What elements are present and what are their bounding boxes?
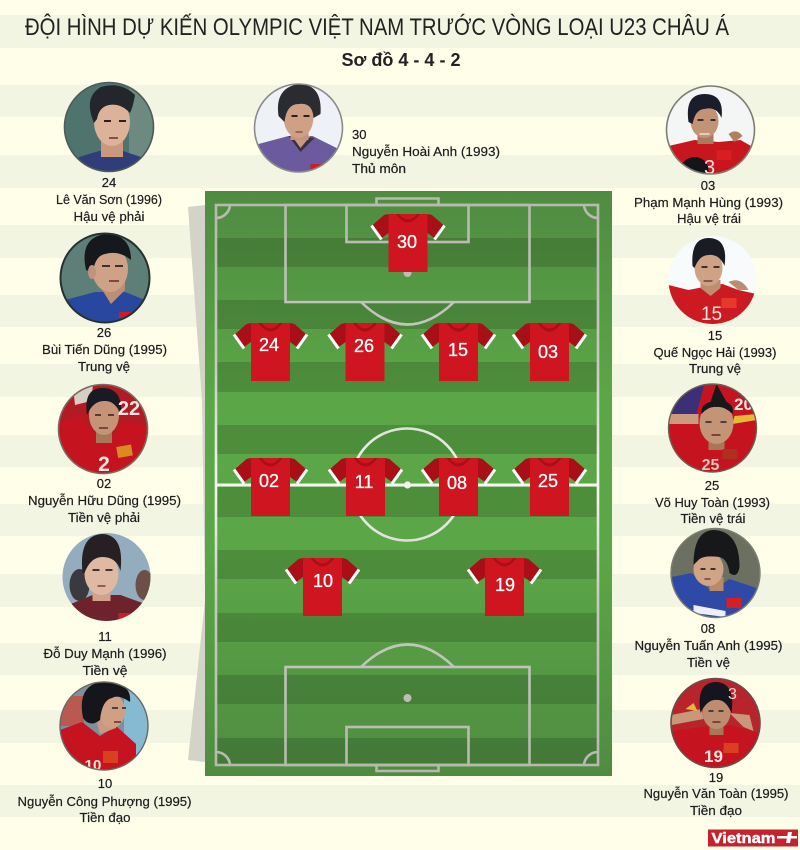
portrait: Phạm Mạnh Hùng [666, 85, 756, 183]
player card: 15 Quế Ngọc Hải: Trung vệ [689, 361, 741, 376]
player card: 11 Đỗ Duy Mạnh: 11 [98, 629, 112, 644]
jersey 15 [422, 323, 495, 381]
portrait: Nguyễn Hoài Anh [254, 83, 344, 173]
player card: 11 Đỗ Duy Mạnh [44, 532, 166, 678]
portrait: Nguyễn Hữu Dũng: 2 [98, 453, 110, 476]
portrait: Nguyễn Văn Toàn [670, 678, 760, 768]
jersey 26 [328, 323, 402, 381]
player card: 26 Bùi Tiến Dũng: 26 [97, 325, 111, 340]
jersey 03 [513, 323, 586, 381]
player card: 25 Võ Huy Toàn: Tiền vệ trái [680, 511, 746, 526]
jersey 02: 02 [259, 471, 279, 491]
player card: 30 Nguyễn Hoài Anh: Nguyễn Hoài Anh (1993) [352, 144, 500, 159]
portrait: Võ Huy Toàn [668, 383, 758, 474]
player card: 26 Bùi Tiến Dũng: Trung vệ [78, 359, 130, 374]
player card: 30 Nguyễn Hoài Anh: 30 [352, 127, 366, 142]
player card: 30 Nguyễn Hoài Anh: Thủ môn [352, 161, 406, 176]
player card: 19 Nguyễn Văn Toàn: Tiền đạo [690, 803, 742, 818]
player card: 15 Quế Ngọc Hải: Quế Ngọc Hải (1993) [654, 345, 776, 360]
portrait: Nguyễn Công Phượng: 10 [85, 757, 101, 774]
jersey 03: 03 [538, 342, 558, 362]
player card: 25 Võ Huy Toàn: Võ Huy Toàn (1993) [655, 495, 770, 510]
subtitle: Sơ đồ 4 - 4 - 2 [342, 50, 460, 70]
player card: 19 Nguyễn Văn Toàn: 19 [709, 770, 723, 785]
jersey 11: 11 [355, 472, 373, 492]
player card: 08 Nguyễn Tuấn Anh [634, 528, 782, 670]
portrait: Lê Văn Sơn [64, 82, 154, 172]
portrait: Quế Ngọc Hải: 15 [701, 304, 722, 325]
portrait: Quế Ngọc Hải [668, 235, 758, 325]
player card: 10 Nguyễn Công Phượng: Nguyễn Công Phượng (1995) [18, 794, 192, 809]
player card: 10 Nguyễn Công Phượng: 10 [98, 776, 112, 791]
player card: 24 Lê Văn Sơn: Hậu vệ phải [74, 209, 145, 224]
player card: 03 Phạm Mạnh Hùng [634, 85, 783, 226]
player card: 24 Lê Văn Sơn: Lê Văn Sơn (1996) [56, 192, 162, 207]
player card: 26 Bùi Tiến Dũng [42, 233, 167, 374]
player card: 15 Quế Ngọc Hải: 15 [708, 328, 722, 343]
jersey 25 [513, 458, 586, 516]
player card: 15 Quế Ngọc Hải [654, 235, 776, 376]
player card: 19 Nguyễn Văn Toàn [644, 678, 788, 818]
logo: Vietnam+ [708, 830, 798, 847]
player card: 11 Đỗ Duy Mạnh: Tiền vệ [82, 663, 128, 678]
player card: 25 Võ Huy Toàn [655, 383, 770, 526]
jersey 19 [468, 558, 541, 616]
portrait: Võ Huy Toàn: 20 [734, 395, 753, 414]
player card: 02 Nguyễn Hữu Dũng [28, 384, 181, 525]
jersey 08: 08 [447, 473, 467, 493]
jersey 19: 19 [495, 575, 515, 595]
jersey 11 [329, 458, 402, 516]
player card: 10 Nguyễn Công Phượng [18, 681, 192, 825]
jersey 26: 26 [354, 336, 374, 356]
portrait: Nguyễn Hữu Dũng [58, 384, 148, 476]
jersey 24 [234, 323, 307, 381]
player card: 24 Lê Văn Sơn [56, 82, 162, 224]
jersey 15: 15 [448, 340, 468, 360]
jersey 02 [234, 458, 307, 516]
player card: 30 Nguyễn Hoài Anh [254, 83, 500, 176]
player card: 08 Nguyễn Tuấn Anh: 08 [701, 621, 715, 636]
player card: 03 Phạm Mạnh Hùng: Hậu vệ trái [677, 211, 741, 226]
jersey 24: 24 [259, 335, 279, 355]
jersey 10: 10 [313, 571, 333, 591]
portrait: Đỗ Duy Mạnh [62, 532, 154, 622]
player card: 26 Bùi Tiến Dũng: Bùi Tiến Dũng (1995) [42, 342, 167, 357]
jersey 30 [372, 214, 444, 272]
player card: 11 Đỗ Duy Mạnh: Đỗ Duy Mạnh (1996) [44, 646, 166, 661]
portrait: Nguyễn Văn Toàn: 3 [728, 686, 737, 703]
football pitch [205, 191, 612, 776]
player card: 02 Nguyễn Hữu Dũng: Tiền vệ phải [68, 510, 140, 525]
portrait: Võ Huy Toàn: 25 [702, 457, 720, 474]
logo: Vietnam+: Vietnam [712, 830, 776, 847]
portrait: Bùi Tiến Dũng [60, 233, 150, 323]
player card: 19 Nguyễn Văn Toàn: Nguyễn Văn Toàn (1995) [644, 786, 788, 801]
jersey 10 [286, 558, 359, 616]
jersey 08 [422, 458, 495, 516]
player card: 02 Nguyễn Hữu Dũng: 02 [97, 476, 111, 491]
pitch shadow [188, 205, 205, 762]
portrait: Nguyễn Tuấn Anh [670, 528, 760, 618]
portrait: Phạm Mạnh Hùng: 3 [704, 157, 715, 179]
player card: 03 Phạm Mạnh Hùng: 03 [701, 178, 715, 193]
portrait: Nguyễn Văn Toàn: 19 [704, 747, 723, 766]
player card: 25 Võ Huy Toàn: 25 [705, 478, 719, 493]
player card: 24 Lê Văn Sơn: 24 [102, 175, 116, 190]
player card: 08 Nguyễn Tuấn Anh: Tiền vệ [687, 655, 730, 670]
jersey 25: 25 [538, 471, 558, 491]
player card: 03 Phạm Mạnh Hùng: Phạm Mạnh Hùng (1993) [634, 195, 783, 210]
portrait: Nguyễn Công Phượng [59, 681, 149, 774]
jersey 30: 30 [397, 232, 417, 252]
player card: 02 Nguyễn Hữu Dũng: Nguyễn Hữu Dũng (1995) [28, 493, 181, 508]
player card: 08 Nguyễn Tuấn Anh: Nguyễn Tuấn Anh (1995) [634, 638, 782, 653]
player card: 10 Nguyễn Công Phượng: Tiền đạo [80, 810, 130, 825]
portrait: Nguyễn Hữu Dũng: 22 [118, 398, 140, 420]
